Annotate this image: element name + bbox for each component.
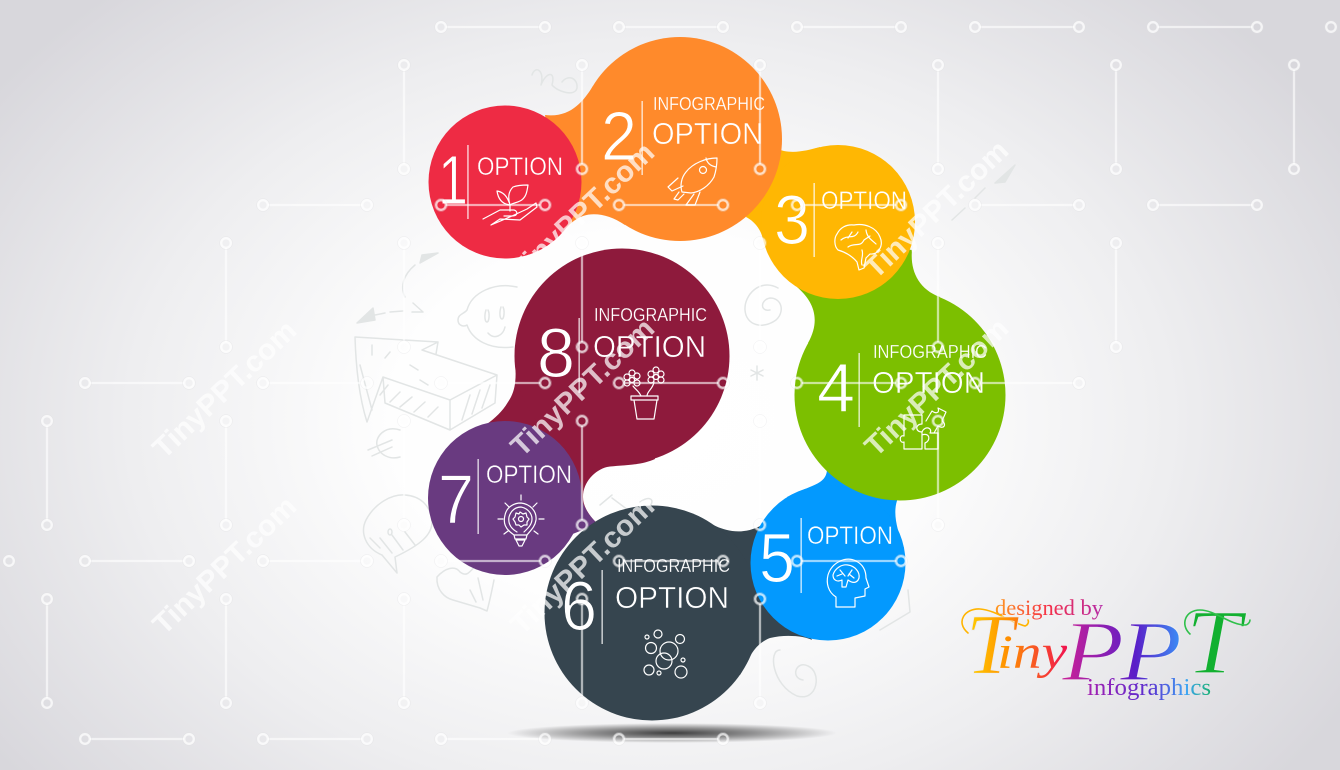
icon: head with brain [827, 559, 869, 607]
number 8: 8 [537, 314, 575, 392]
logo: designed by TinyPPT infographics: infographics [1087, 675, 1211, 701]
number 4: 4 [817, 349, 855, 427]
icon: flower pot [624, 367, 664, 419]
doodle: dashed arrows [357, 253, 438, 323]
number 3: 3 [774, 181, 810, 259]
logo: designed by TinyPPT infographics: T [1186, 591, 1247, 693]
watermarks: TinyPPT.com [147, 491, 303, 641]
blob 6: dark slate [544, 506, 812, 720]
logo: designed by TinyPPT infographics: P [1119, 603, 1182, 699]
ground shadow [507, 723, 837, 743]
watermarks: TinyPPT.com [147, 315, 303, 465]
heading 6: INFOGRAPHIC [617, 556, 730, 576]
number 7: 7 [438, 460, 474, 538]
heading 5: OPTION [807, 522, 893, 550]
number 1: 1 [438, 141, 468, 219]
logo: designed by TinyPPT infographics: T [966, 596, 1019, 692]
heading 7: OPTION [486, 461, 572, 489]
blob 5: blue [750, 470, 906, 640]
blob 4: green [794, 240, 1006, 500]
logo: designed by TinyPPT infographics: iny [997, 626, 1068, 679]
number 2: 2 [601, 97, 637, 175]
icon: bubbles [644, 630, 687, 678]
watermarks: TinyPPT.com [505, 313, 661, 463]
logo: designed by TinyPPT infographics: designed by [995, 595, 1103, 620]
doodle: speech bubbles [364, 495, 494, 611]
icon: light bulb [498, 495, 544, 546]
blob 6: dark slate: OPTION [615, 580, 729, 615]
blob 8: maroon: OPTION [593, 329, 706, 364]
doodle: smiley face [458, 286, 517, 348]
heading 3: OPTION [821, 187, 907, 215]
doodle: spirals and squiggles [532, 70, 1015, 697]
blob 2: orange [545, 37, 782, 241]
blob 4: green: OPTION [872, 365, 985, 400]
icon: plant in hand [483, 185, 537, 225]
icon: brain [835, 224, 881, 270]
logo: designed by TinyPPT infographics [962, 591, 1250, 701]
heading 1: OPTION [477, 153, 563, 181]
doodle: euro sign [368, 429, 400, 458]
blob 3: yellow [746, 145, 915, 299]
doodle: big arrow block [355, 337, 497, 430]
watermarks: TinyPPT.com [859, 313, 1015, 463]
number 5: 5 [759, 519, 795, 597]
blob 2: orange: OPTION [652, 116, 763, 151]
blob 8: maroon [487, 248, 730, 524]
heading 4: INFOGRAPHIC [873, 342, 987, 362]
watermarks: TinyPPT.com [505, 491, 661, 641]
blob 7: purple [428, 421, 598, 575]
watermarks: TinyPPT.com [859, 135, 1015, 285]
logo: designed by TinyPPT infographics: P [1061, 603, 1124, 699]
number 6: 6 [561, 567, 597, 645]
heading 2: INFOGRAPHIC [653, 94, 765, 114]
heading 8: INFOGRAPHIC [594, 305, 707, 325]
watermarks [147, 135, 1015, 641]
icon: rocket [668, 158, 717, 205]
blob 1: red [428, 106, 582, 258]
watermarks: TinyPPT.com [505, 137, 661, 287]
icon: puzzle [900, 408, 946, 449]
